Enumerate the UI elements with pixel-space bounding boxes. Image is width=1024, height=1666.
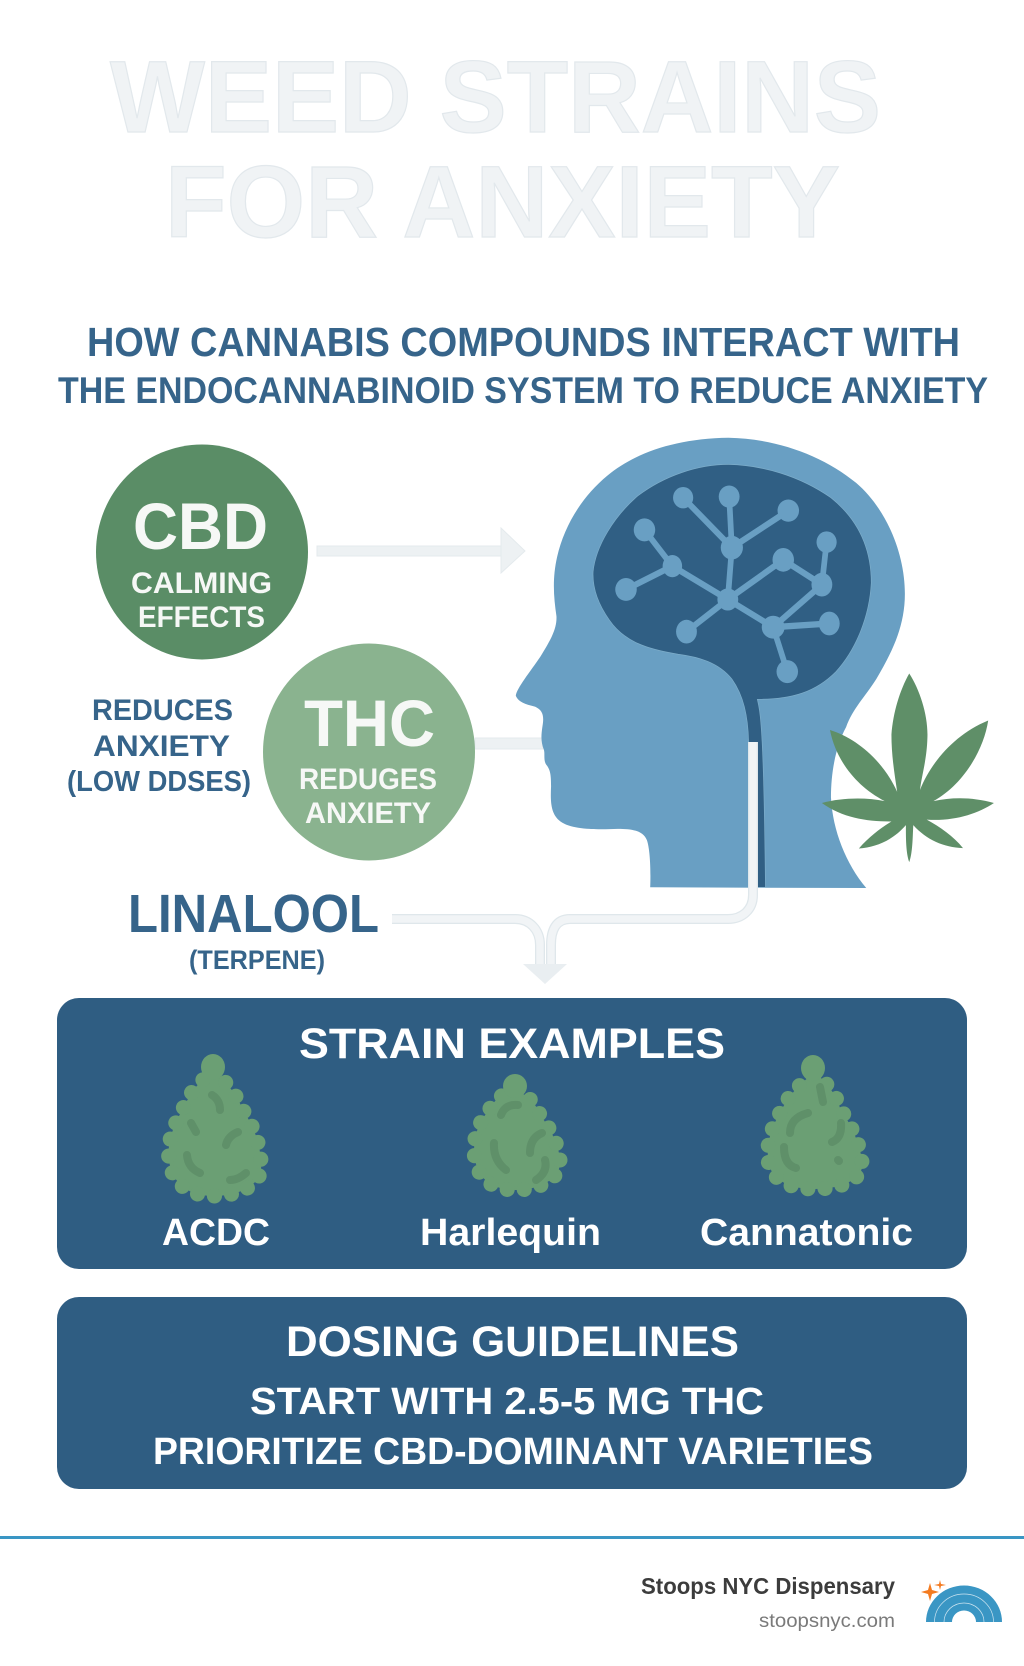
footer brand text: Stoops NYC Dispensary bbox=[641, 1573, 895, 1599]
icon: head with brain network bbox=[516, 438, 905, 888]
CBD label: CBD bbox=[133, 489, 268, 563]
icon: cannabis leaf bbox=[822, 673, 994, 862]
head silhouette bbox=[516, 438, 905, 888]
text: reduces anxiety low doses: ANXIETY bbox=[93, 730, 230, 763]
text: reduces anxiety low doses: (LOW DDSES) bbox=[67, 766, 251, 798]
circle: CBD bbox=[96, 444, 308, 660]
title bbox=[110, 40, 881, 259]
dosing text: START WITH 2.5-5 MG THC bbox=[250, 1381, 764, 1423]
strain: ACDC: ACDC bbox=[162, 1212, 270, 1254]
CBD effect: CALMING bbox=[131, 567, 272, 600]
neural network bbox=[626, 497, 829, 672]
brain and spinal cord bbox=[593, 464, 871, 887]
dosing text bbox=[153, 1381, 873, 1473]
footer brand text: stoopsnyc.com bbox=[759, 1610, 895, 1632]
CBD effect: EFFECTS bbox=[138, 601, 265, 634]
icon: Stoops logo bbox=[921, 1580, 1002, 1622]
title: FOR ANXIETY bbox=[165, 145, 840, 259]
circle: THC bbox=[263, 644, 475, 860]
THC effect: ANXIETY bbox=[305, 797, 431, 830]
subtitle heading bbox=[58, 319, 988, 411]
strain heading: STRAIN EXAMPLES bbox=[299, 1020, 725, 1068]
title: WEED STRAINS bbox=[110, 40, 881, 154]
text: linalool terpene: (TERPENE) bbox=[189, 945, 325, 975]
text: linalool terpene bbox=[128, 884, 379, 975]
THC effect: REDUGES bbox=[299, 763, 437, 796]
strain: Harlequin: Harlequin bbox=[420, 1212, 601, 1254]
arrow: CBD to head bbox=[317, 528, 525, 573]
text: linalool terpene: LINALOOL bbox=[128, 884, 379, 944]
strain: ACDC bbox=[162, 1054, 270, 1254]
panel: strain examples bbox=[57, 998, 967, 1269]
THC effect bbox=[299, 763, 437, 830]
strain: Cannatonic bbox=[700, 1055, 913, 1254]
footer brand text bbox=[641, 1573, 895, 1632]
text: reduces anxiety low doses: REDUCES bbox=[92, 694, 233, 727]
CBD effect bbox=[131, 567, 272, 634]
dosing heading: DOSING GUIDELINES bbox=[286, 1318, 739, 1366]
arrow: linalool and spine merge into strain panel bbox=[392, 742, 753, 984]
strain: Cannatonic: Cannatonic bbox=[700, 1212, 913, 1254]
THC label: THC bbox=[304, 686, 435, 760]
arrow: THC to head bbox=[475, 738, 543, 749]
text: reduces anxiety low doses bbox=[67, 694, 251, 798]
panel: dosing guidelines bbox=[57, 1297, 967, 1489]
strain: Harlequin bbox=[420, 1074, 601, 1254]
subtitle heading: HOW CANNABIS COMPOUNDS INTERACT WITH bbox=[87, 319, 960, 365]
dosing text: PRIORITIZE CBD-DOMINANT VARIETIES bbox=[153, 1431, 873, 1473]
